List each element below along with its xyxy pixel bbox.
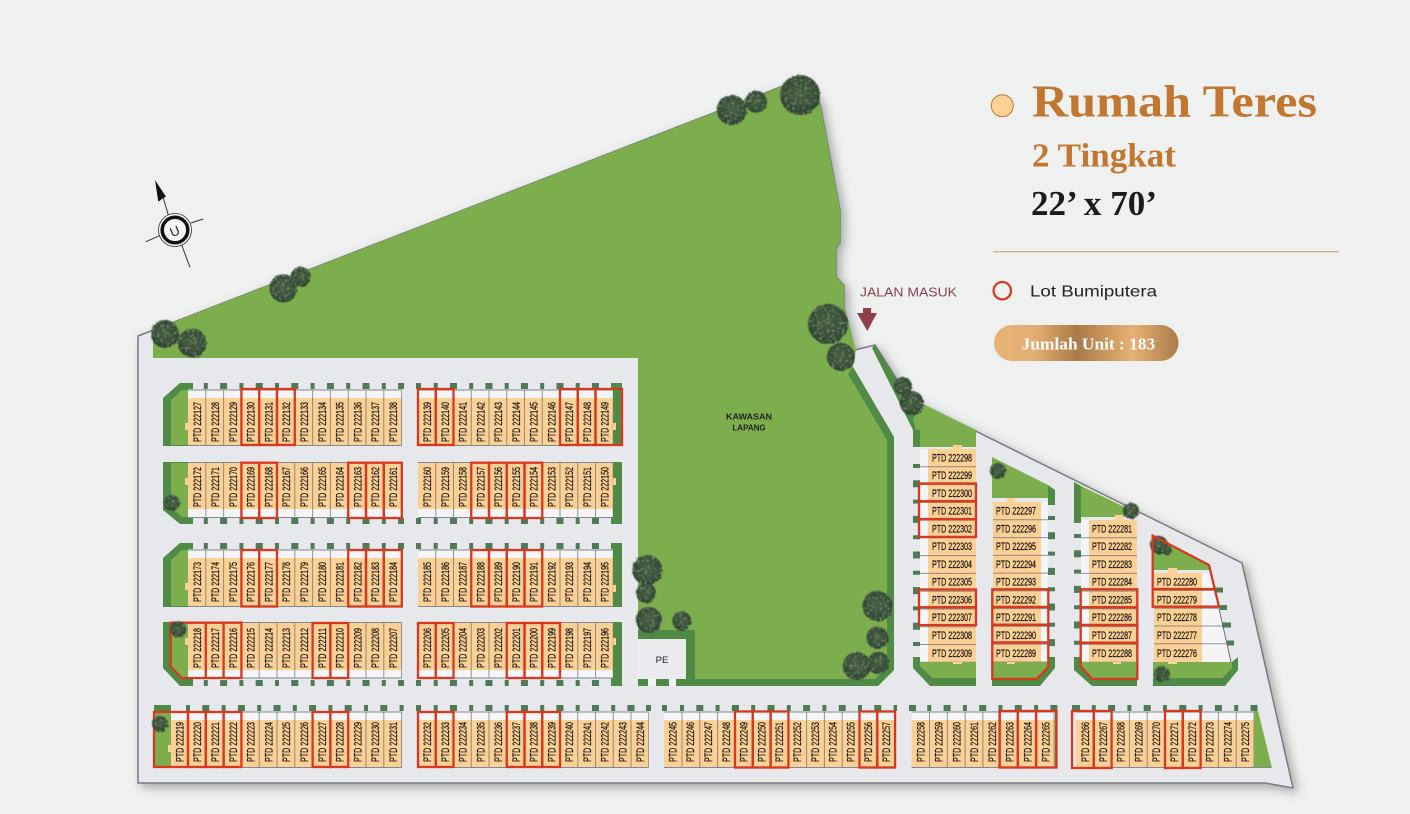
row: PTD 222218 to 222207: PTD 222215 xyxy=(246,628,258,668)
row: PTD 222232 to 222244: PTD 222232 xyxy=(422,722,434,762)
row: PTD 222185 to 222195 xyxy=(416,543,613,606)
row: PTD 222232 to 222244: PTD 222235 xyxy=(475,722,487,762)
row: PTD 222172 to 222161: PTD 222172 xyxy=(192,467,204,507)
bumiputera lots xyxy=(241,463,402,518)
column: PTD 222280 to 222276: PTD 222276 xyxy=(1157,648,1197,660)
row: PTD 222218 to 222207: PTD 222217 xyxy=(210,628,222,668)
row: PTD 222173 to 222184: PTD 222181 xyxy=(335,562,347,602)
row: PTD 222127 to 222138 xyxy=(188,386,404,446)
row: PTD 222127 to 222138: PTD 222137 xyxy=(370,402,382,442)
row: PTD 222206 to 222196 xyxy=(416,622,613,686)
row: PTD 222172 to 222161: PTD 222169 xyxy=(246,467,258,507)
lawn border band xyxy=(638,367,894,686)
column: PTD 222298 to 222309: PTD 222301 xyxy=(932,506,972,518)
row: PTD 222206 to 222196: PTD 222204 xyxy=(458,628,470,668)
row: PTD 222127 to 222138: PTD 222131 xyxy=(263,402,275,442)
row: PTD 222173 to 222184: PTD 222175 xyxy=(228,562,240,602)
legend: Lot Bumiputera: Lot Bumiputera xyxy=(1030,284,1157,301)
column: PTD 222298 to 222309: PTD 222306 xyxy=(932,594,972,606)
row: PTD 222219 to 222231: PTD 222223 xyxy=(246,722,258,762)
column: PTD 222281 to 222288: PTD 222281 xyxy=(1092,523,1132,535)
column: PTD 222297 to 222289: PTD 222297 xyxy=(996,506,1036,518)
column: PTD 222280 to 222276: PTD 222279 xyxy=(1157,594,1197,606)
row: PTD 222139 to 222149 xyxy=(416,383,622,446)
column: PTD 222298 to 222309: PTD 222302 xyxy=(932,523,972,535)
row: PTD 222173 to 222184: PTD 222183 xyxy=(370,562,382,602)
row: PTD 222160 to 222150: PTD 222156 xyxy=(493,467,505,507)
row: PTD 222232 to 222244: PTD 222238 xyxy=(528,722,540,762)
column: PTD 222297 to 222289: PTD 222293 xyxy=(996,577,1036,589)
header divider xyxy=(993,251,1339,253)
row: PTD 222245 to 222257: PTD 222249 xyxy=(739,722,751,762)
row: PTD 222219 to 222231: PTD 222224 xyxy=(263,722,275,762)
row: PTD 222245 to 222257: PTD 222255 xyxy=(845,722,857,762)
row: PTD 222232 to 222244: PTD 222243 xyxy=(617,722,629,762)
bumiputera outline: PTD 222280 and 222279 xyxy=(1153,536,1219,607)
row: PTD 222173 to 222184: PTD 222178 xyxy=(281,562,293,602)
row: PTD 222173 to 222184: PTD 222182 xyxy=(352,562,364,602)
row: PTD 222185 to 222195: PTD 222193 xyxy=(564,562,576,602)
row: PTD 222232 to 222244: PTD 222241 xyxy=(582,722,594,762)
row: PTD 222245 to 222257: PTD 222252 xyxy=(792,722,804,762)
row: PTD 222232 to 222244: PTD 222244 xyxy=(635,722,647,762)
row: PTD 222258 to 222265: PTD 222262 xyxy=(987,722,999,762)
row: PTD 222232 to 222244: PTD 222236 xyxy=(493,722,505,762)
row: PTD 222219 to 222231: PTD 222226 xyxy=(299,722,311,762)
entrance verge xyxy=(872,345,920,447)
row: PTD 222245 to 222257: PTD 222256 xyxy=(863,722,875,762)
legend marker: peach lot colour xyxy=(991,95,1013,117)
column: PTD 222281 to 222288: PTD 222288 xyxy=(1092,648,1132,660)
row: PTD 222127 to 222138: PTD 222129 xyxy=(228,402,240,442)
row: PTD 222160 to 222150: PTD 222151 xyxy=(582,467,594,507)
column: PTD 222298 to 222309: PTD 222300 xyxy=(932,488,972,500)
row: PTD 222160 to 222150: PTD 222154 xyxy=(528,467,540,507)
row: PTD 222266 to 222275: PTD 222269 xyxy=(1133,722,1145,762)
label: Kawasan Lapang: KAWASAN xyxy=(726,412,772,422)
column: PTD 222281 to 222288 xyxy=(1078,515,1137,679)
row: PTD 222127 to 222138: PTD 222130 xyxy=(246,402,258,442)
row: PTD 222160 to 222150: PTD 222150 xyxy=(600,467,612,507)
row: PTD 222219 to 222231: PTD 222219 xyxy=(174,722,186,762)
column landscaping: tops and bottoms xyxy=(913,405,1238,686)
row: PTD 222232 to 222244: PTD 222240 xyxy=(564,722,576,762)
row: PTD 222127 to 222138: PTD 222128 xyxy=(210,402,222,442)
bumiputera lots xyxy=(241,550,402,606)
bumiputera lots xyxy=(1072,711,1201,768)
bumiputera lots xyxy=(1081,589,1137,679)
column: PTD 222281 to 222288: PTD 222284 xyxy=(1092,577,1132,589)
row: PTD 222172 to 222161: PTD 222161 xyxy=(388,467,400,507)
row: PTD 222172 to 222161: PTD 222171 xyxy=(210,467,222,507)
row: PTD 222185 to 222195: PTD 222195 xyxy=(600,562,612,602)
row: PTD 222173 to 222184: PTD 222174 xyxy=(210,562,222,602)
row: PTD 222219 to 222231: PTD 222225 xyxy=(281,722,293,762)
row: PTD 222245 to 222257: PTD 222245 xyxy=(667,722,679,762)
row: PTD 222172 to 222161: PTD 222163 xyxy=(352,467,364,507)
row: PTD 222218 to 222207: PTD 222210 xyxy=(335,628,347,668)
column: PTD 222281 to 222288: PTD 222282 xyxy=(1092,541,1132,553)
row: PTD 222139 to 222149: PTD 222140 xyxy=(440,402,452,442)
column: PTD 222281 to 222288: PTD 222287 xyxy=(1092,630,1132,642)
row: PTD 222172 to 222161: PTD 222164 xyxy=(335,467,347,507)
row: PTD 222185 to 222195: PTD 222190 xyxy=(511,562,523,602)
row: PTD 222218 to 222207: PTD 222218 xyxy=(192,628,204,668)
trees xyxy=(151,75,1172,732)
row: PTD 222185 to 222195: PTD 222188 xyxy=(475,562,487,602)
row: PTD 222258 to 222265 xyxy=(909,705,1058,768)
row: PTD 222172 to 222161: PTD 222162 xyxy=(370,467,382,507)
title: Rumah Teres xyxy=(1032,76,1317,127)
row: PTD 222258 to 222265: PTD 222258 xyxy=(916,722,928,762)
row: PTD 222185 to 222195: PTD 222194 xyxy=(582,562,594,602)
row: PTD 222173 to 222184: PTD 222173 xyxy=(192,562,204,602)
row: PTD 222127 to 222138: PTD 222127 xyxy=(192,402,204,442)
row: PTD 222218 to 222207 xyxy=(171,622,404,683)
row: PTD 222219 to 222231 xyxy=(154,708,404,768)
row: PTD 222219 to 222231: PTD 222230 xyxy=(370,722,382,762)
row: PTD 222218 to 222207: PTD 222208 xyxy=(370,628,382,668)
substation PE xyxy=(638,630,695,686)
row: PTD 222219 to 222231: PTD 222229 xyxy=(352,722,364,762)
row: PTD 222127 to 222138: PTD 222135 xyxy=(335,402,347,442)
row: PTD 222218 to 222207: PTD 222207 xyxy=(388,628,400,668)
row: PTD 222127 to 222138: PTD 222134 xyxy=(317,402,329,442)
row: PTD 222266 to 222275: PTD 222266 xyxy=(1080,722,1092,762)
row: PTD 222206 to 222196: PTD 222205 xyxy=(440,628,452,668)
row: PTD 222245 to 222257: PTD 222247 xyxy=(703,722,715,762)
row: PTD 222206 to 222196: PTD 222203 xyxy=(475,628,487,668)
row: PTD 222266 to 222275: PTD 222270 xyxy=(1151,722,1163,762)
row: PTD 222232 to 222244 xyxy=(416,705,651,768)
legend: Lot Bumiputera xyxy=(994,282,1157,301)
row: PTD 222160 to 222150: PTD 222153 xyxy=(546,467,558,507)
row: PTD 222172 to 222161: PTD 222168 xyxy=(263,467,275,507)
row: PTD 222232 to 222244: PTD 222233 xyxy=(440,722,452,762)
column: PTD 222298 to 222309: PTD 222305 xyxy=(932,577,972,589)
bumiputera lots xyxy=(418,712,560,767)
row: PTD 222185 to 222195: PTD 222189 xyxy=(493,562,505,602)
row: PTD 222245 to 222257: PTD 222250 xyxy=(756,722,768,762)
row: PTD 222218 to 222207: PTD 222214 xyxy=(263,628,275,668)
row: PTD 222206 to 222196: PTD 222206 xyxy=(422,628,434,668)
row: PTD 222245 to 222257: PTD 222257 xyxy=(881,722,893,762)
row: PTD 222127 to 222138: PTD 222133 xyxy=(299,402,311,442)
row: PTD 222160 to 222150: PTD 222159 xyxy=(440,467,452,507)
row: PTD 222219 to 222231: PTD 222231 xyxy=(388,722,400,762)
row: PTD 222127 to 222138: PTD 222136 xyxy=(352,402,364,442)
column: PTD 222281 to 222288: PTD 222283 xyxy=(1092,559,1132,571)
bumiputera lots xyxy=(471,550,542,606)
column: PTD 222297 to 222289: PTD 222290 xyxy=(996,630,1036,642)
row: PTD 222258 to 222265: PTD 222263 xyxy=(1005,722,1017,762)
bumiputera lots xyxy=(919,484,976,625)
row: PTD 222160 to 222150: PTD 222157 xyxy=(475,467,487,507)
bumiputera lots xyxy=(735,712,895,768)
compass: north arrow: U xyxy=(168,223,182,240)
row: PTD 222266 to 222275: PTD 222275 xyxy=(1240,722,1252,762)
row: PTD 222245 to 222257: PTD 222253 xyxy=(810,722,822,762)
unit count pill xyxy=(994,325,1178,361)
bumiputera lots xyxy=(241,389,295,445)
subtitle: storeys: 2 Tingkat xyxy=(1032,138,1177,175)
row: PTD 222172 to 222161: PTD 222165 xyxy=(317,467,329,507)
row: PTD 222139 to 222149: PTD 222146 xyxy=(546,402,558,442)
column: PTD 222298 to 222309: PTD 222308 xyxy=(932,630,972,642)
row: PTD 222219 to 222231: PTD 222227 xyxy=(317,722,329,762)
bumiputera lots xyxy=(171,623,348,678)
column: PTD 222298 to 222309: PTD 222303 xyxy=(932,541,972,553)
row: PTD 222172 to 222161 xyxy=(188,462,404,521)
row: PTD 222266 to 222275 xyxy=(1072,705,1270,768)
compass: north arrow xyxy=(146,180,203,267)
block end landscaping, right xyxy=(611,383,1272,768)
row: PTD 222258 to 222265: PTD 222260 xyxy=(951,722,963,762)
row: PTD 222266 to 222275: PTD 222271 xyxy=(1169,722,1181,762)
row: PTD 222185 to 222195: PTD 222186 xyxy=(440,562,452,602)
bumiputera lots xyxy=(418,623,560,678)
row: PTD 222245 to 222257: PTD 222254 xyxy=(828,722,840,762)
row: PTD 222185 to 222195: PTD 222185 xyxy=(422,562,434,602)
row: PTD 222139 to 222149: PTD 222141 xyxy=(458,402,470,442)
row: PTD 222139 to 222149: PTD 222149 xyxy=(600,402,612,442)
site plan ground: roads xyxy=(138,80,1293,788)
column: PTD 222298 to 222309: PTD 222307 xyxy=(932,612,972,624)
row: PTD 222127 to 222138: PTD 222138 xyxy=(388,402,400,442)
row: PTD 222206 to 222196: PTD 222198 xyxy=(564,628,576,668)
row: PTD 222219 to 222231: PTD 222222 xyxy=(228,722,240,762)
row: PTD 222172 to 222161: PTD 222166 xyxy=(299,467,311,507)
row: PTD 222160 to 222150: PTD 222155 xyxy=(511,467,523,507)
row: PTD 222139 to 222149: PTD 222147 xyxy=(564,402,576,442)
row: PTD 222245 to 222257: PTD 222251 xyxy=(774,722,786,762)
row: PTD 222245 to 222257 xyxy=(662,705,897,768)
column: PTD 222298 to 222309 xyxy=(916,445,976,664)
row: PTD 222185 to 222195: PTD 222187 xyxy=(458,562,470,602)
row: PTD 222266 to 222275: PTD 222274 xyxy=(1222,722,1234,762)
row: PTD 222139 to 222149: PTD 222144 xyxy=(511,402,523,442)
row: PTD 222206 to 222196: PTD 222201 xyxy=(511,628,523,668)
row: PTD 222139 to 222149: PTD 222143 xyxy=(493,402,505,442)
row: PTD 222232 to 222244: PTD 222234 xyxy=(458,722,470,762)
row: PTD 222139 to 222149: PTD 222148 xyxy=(582,402,594,442)
row: PTD 222172 to 222161: PTD 222167 xyxy=(281,467,293,507)
row: PTD 222258 to 222265: PTD 222261 xyxy=(969,722,981,762)
row: PTD 222218 to 222207: PTD 222209 xyxy=(352,628,364,668)
bumiputera lots xyxy=(1000,711,1056,768)
column: PTD 222280 to 222276: PTD 222277 xyxy=(1157,630,1197,642)
row: PTD 222219 to 222231: PTD 222221 xyxy=(210,722,222,762)
column: PTD 222298 to 222309: PTD 222304 xyxy=(932,559,972,571)
row: PTD 222218 to 222207: PTD 222211 xyxy=(317,628,329,668)
row: PTD 222160 to 222150: PTD 222152 xyxy=(564,467,576,507)
open field: Kawasan Lapang lawn xyxy=(153,80,894,686)
row: PTD 222206 to 222196: PTD 222200 xyxy=(528,628,540,668)
column: PTD 222280 to 222276: PTD 222280 xyxy=(1157,577,1197,589)
entrance arrow xyxy=(857,308,877,331)
bumiputera lots xyxy=(992,589,1048,679)
row: PTD 222258 to 222265: PTD 222265 xyxy=(1040,722,1052,762)
row: PTD 222173 to 222184: PTD 222180 xyxy=(317,562,329,602)
column: PTD 222281 to 222288: PTD 222285 xyxy=(1092,594,1132,606)
row: PTD 222139 to 222149: PTD 222145 xyxy=(528,402,540,442)
substation PE: PE xyxy=(656,655,668,666)
row: PTD 222160 to 222150: PTD 222158 xyxy=(458,467,470,507)
lot size: 22’ x 70’ xyxy=(1031,184,1157,223)
unit count pill: Jumlah Unit : 183 xyxy=(1022,334,1155,353)
row: PTD 222185 to 222195: PTD 222191 xyxy=(528,562,540,602)
row: PTD 222245 to 222257: PTD 222248 xyxy=(721,722,733,762)
column: PTD 222281 to 222288: PTD 222286 xyxy=(1092,612,1132,624)
column: PTD 222298 to 222309: PTD 222298 xyxy=(932,452,972,464)
column: PTD 222297 to 222289: PTD 222291 xyxy=(996,612,1036,624)
column: PTD 222297 to 222289 xyxy=(992,498,1052,679)
row: PTD 222218 to 222207: PTD 222212 xyxy=(299,628,311,668)
row: PTD 222266 to 222275: PTD 222272 xyxy=(1187,722,1199,762)
bumiputera lots xyxy=(418,389,622,445)
row: PTD 222266 to 222275: PTD 222268 xyxy=(1116,722,1128,762)
row: PTD 222232 to 222244: PTD 222237 xyxy=(511,722,523,762)
row: PTD 222173 to 222184 xyxy=(188,546,404,606)
row: PTD 222127 to 222138: PTD 222132 xyxy=(281,402,293,442)
row: PTD 222173 to 222184: PTD 222184 xyxy=(388,562,400,602)
column: PTD 222298 to 222309: PTD 222299 xyxy=(932,470,972,482)
column: PTD 222280 to 222276: PTD 222278 xyxy=(1157,612,1197,624)
bumiputera lots xyxy=(471,463,542,518)
row: PTD 222245 to 222257: PTD 222246 xyxy=(685,722,697,762)
row: PTD 222206 to 222196: PTD 222202 xyxy=(493,628,505,668)
row: PTD 222266 to 222275: PTD 222267 xyxy=(1098,722,1110,762)
row: PTD 222173 to 222184: PTD 222176 xyxy=(246,562,258,602)
block end landscaping, left xyxy=(154,383,193,768)
row: PTD 222206 to 222196: PTD 222199 xyxy=(546,628,558,668)
row: PTD 222139 to 222149: PTD 222142 xyxy=(475,402,487,442)
column: PTD 222297 to 222289: PTD 222289 xyxy=(996,648,1036,660)
row: PTD 222139 to 222149: PTD 222139 xyxy=(422,402,434,442)
row: PTD 222232 to 222244: PTD 222239 xyxy=(546,722,558,762)
row: PTD 222219 to 222231: PTD 222220 xyxy=(192,722,204,762)
row: PTD 222266 to 222275: PTD 222273 xyxy=(1205,722,1217,762)
label: Kawasan Lapang: LAPANG xyxy=(732,424,766,433)
row: PTD 222206 to 222196: PTD 222197 xyxy=(582,628,594,668)
row: PTD 222206 to 222196: PTD 222196 xyxy=(600,628,612,668)
row: PTD 222218 to 222207: PTD 222216 xyxy=(228,628,240,668)
row: PTD 222160 to 222150 xyxy=(416,462,613,524)
column: PTD 222297 to 222289: PTD 222292 xyxy=(996,594,1036,606)
row: PTD 222219 to 222231: PTD 222228 xyxy=(335,722,347,762)
column: PTD 222297 to 222289: PTD 222295 xyxy=(996,541,1036,553)
column: PTD 222280 to 222276 xyxy=(1154,568,1234,664)
row: PTD 222173 to 222184: PTD 222179 xyxy=(299,562,311,602)
row: PTD 222218 to 222207: PTD 222213 xyxy=(281,628,293,668)
row: PTD 222172 to 222161: PTD 222170 xyxy=(228,467,240,507)
row: PTD 222258 to 222265: PTD 222259 xyxy=(934,722,946,762)
row: PTD 222173 to 222184: PTD 222177 xyxy=(263,562,275,602)
bumiputera lots xyxy=(154,712,348,767)
column: PTD 222297 to 222289: PTD 222294 xyxy=(996,559,1036,571)
row: PTD 222185 to 222195: PTD 222192 xyxy=(546,562,558,602)
row: PTD 222232 to 222244: PTD 222242 xyxy=(600,722,612,762)
row: PTD 222160 to 222150: PTD 222160 xyxy=(422,467,434,507)
entrance label: Jalan Masuk: JALAN MASUK xyxy=(860,285,957,300)
column: PTD 222298 to 222309: PTD 222309 xyxy=(932,648,972,660)
row: PTD 222258 to 222265: PTD 222264 xyxy=(1022,722,1034,762)
column: PTD 222297 to 222289: PTD 222296 xyxy=(996,523,1036,535)
